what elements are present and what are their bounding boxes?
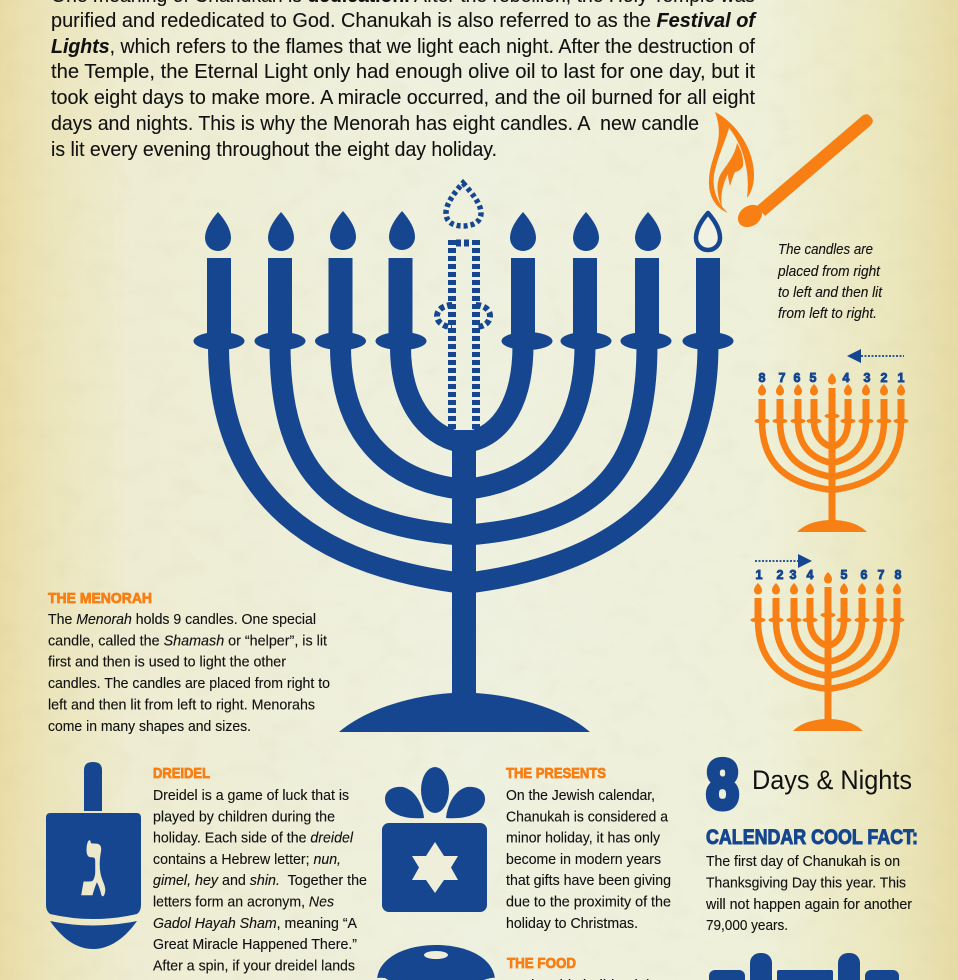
presents text: that gifts have been giving: [506, 872, 671, 889]
candle numbers: right to left: 1: [898, 371, 905, 385]
menorah text: candle, called the Shamash or “helper”, is lit: [48, 632, 328, 650]
calendar text: The first day of Chanukah is on: [706, 853, 900, 870]
large blue menorah: [194, 183, 734, 732]
days and nights: Days & Nights: [752, 765, 912, 795]
candle numbers: right to left: 2: [881, 371, 888, 385]
menorah arms: [218, 345, 708, 583]
dreidel text: Gadol Hayah Sham, meaning “A: [153, 915, 358, 932]
intro text block: [51, 0, 757, 161]
small orange menorah: placing candles: [754, 373, 908, 532]
numeral eight: 8: [706, 746, 738, 823]
candle note: [777, 241, 883, 322]
shamash dashed candle: [437, 183, 490, 430]
heading: dreidel: DREIDEL: [153, 765, 210, 782]
dreidel text: After a spin, if your dreidel lands: [153, 957, 355, 974]
candle note: The candles are: [778, 241, 873, 258]
candle numbers: left to right: [756, 568, 902, 582]
candle note: to left and then lit: [778, 284, 883, 301]
candle numbers: right to left: 4: [843, 371, 850, 385]
presents text: become in modern years: [506, 851, 661, 868]
candle numbers: right to left: 6: [794, 371, 801, 385]
presents text: On the Jewish calendar,: [506, 787, 655, 804]
menorah text: first and then is used to light the other: [48, 654, 286, 670]
intro text block: purified and rededicated to God. Chanukah is also referred to as the Festival of: [51, 10, 757, 32]
presents text: Chanukah is considered a: [506, 808, 668, 825]
candle note: from left to right.: [778, 305, 877, 322]
icon: food: [372, 945, 497, 980]
heading: the food: THE FOOD: [507, 955, 576, 972]
menorah text: left and then lit from left to right. Menorahs: [48, 696, 315, 714]
heading: the presents: THE PRESENTS: [506, 765, 606, 782]
dreidel text: Great Miracle Happened There.”: [153, 936, 357, 953]
menorah knobs: [194, 332, 734, 350]
dreidel text: Dreidel is a game of luck that is: [153, 787, 349, 804]
candle numbers: left to right: 6: [861, 568, 868, 582]
heading: calendar cool fact: CALENDAR COOL FACT:: [706, 826, 918, 849]
intro text block: the Temple, the Eternal Light only had enough olive oil to last for one day, but it: [51, 61, 755, 83]
dreidel text: played by children during the: [153, 808, 335, 825]
candle numbers: right to left: 3: [864, 371, 871, 385]
intro text block: days and nights. This is why the Menorah has eight candles. A new candle: [51, 113, 699, 135]
presents text: holiday to Christmas.: [506, 915, 638, 932]
candle numbers: right to left: 7: [779, 371, 786, 385]
small orange menorah: lighting candles: [750, 572, 904, 731]
panel: the food: [507, 955, 657, 980]
panel: calendar fact: [705, 746, 918, 934]
arrow: right to left: [847, 349, 904, 363]
candle numbers: left to right: 1: [756, 568, 763, 582]
match flame: [709, 112, 754, 213]
icon: lit match: [709, 112, 873, 232]
menorah central stem and base: [339, 430, 590, 732]
calendar text: will not happen again for another: [705, 896, 912, 913]
candle numbers: right to left: 8: [759, 371, 766, 385]
match stick: [757, 114, 873, 216]
icon: bottom right blue shape: [709, 953, 899, 980]
match head: [734, 200, 766, 232]
candle numbers: left to right: 7: [878, 568, 885, 582]
dreidel text: letters form an acronym, Nes: [153, 894, 334, 910]
candle numbers: right to left: [759, 371, 905, 385]
dreidel text: gimel, hey and shin. Together the: [153, 872, 367, 889]
presents text: minor holiday, it has only: [506, 830, 660, 847]
intro text block: Lights, which refers to the flames that we light each night. After the destruction of: [51, 36, 755, 58]
icon: present: [382, 767, 487, 912]
panel: dreidel: [153, 765, 367, 974]
panel: the menorah: [48, 590, 330, 735]
candle numbers: right to left: 5: [810, 371, 817, 385]
dreidel text: holiday. Each side of the dreidel: [153, 830, 354, 847]
intro text block: took eight days to make more. A miracle occurred, and the oil burned for all eight: [51, 87, 755, 109]
presents text: due to the proximity of the: [506, 894, 671, 910]
dreidel text: contains a Hebrew letter; nun,: [153, 851, 341, 868]
dreidel text: [153, 787, 367, 974]
menorah text: The Menorah holds 9 candles. One special: [48, 611, 316, 628]
panel: the presents: [506, 765, 671, 932]
menorah text: candles. The candles are placed from right to: [48, 675, 330, 692]
presents text: [506, 787, 671, 932]
menorah flames: [205, 211, 720, 251]
calendar text: [705, 853, 912, 934]
candle numbers: left to right: 5: [841, 568, 848, 582]
intro text block: is lit every evening throughout the eight day holiday.: [51, 139, 497, 161]
heading: the menorah: THE MENORAH: [48, 590, 152, 607]
menorah candles: [207, 258, 720, 348]
icon: dreidel: [46, 762, 141, 949]
present bow: [385, 767, 485, 818]
dreidel letter gimel: ג: [81, 814, 107, 915]
present box: [382, 823, 487, 912]
calendar text: Thanksgiving Day this year. This: [706, 874, 906, 892]
candle numbers: left to right: 8: [895, 568, 902, 582]
candle numbers: left to right: 3: [790, 568, 797, 582]
arrow: left to right: [755, 554, 812, 568]
menorah text: [48, 611, 330, 735]
candle note: placed from right: [777, 263, 881, 280]
candle numbers: left to right: 2: [777, 568, 784, 582]
candle numbers: left to right: 4: [807, 568, 814, 582]
calendar text: 79,000 years.: [706, 917, 788, 934]
menorah text: come in many shapes and sizes.: [48, 718, 251, 735]
star of david: [412, 842, 458, 893]
